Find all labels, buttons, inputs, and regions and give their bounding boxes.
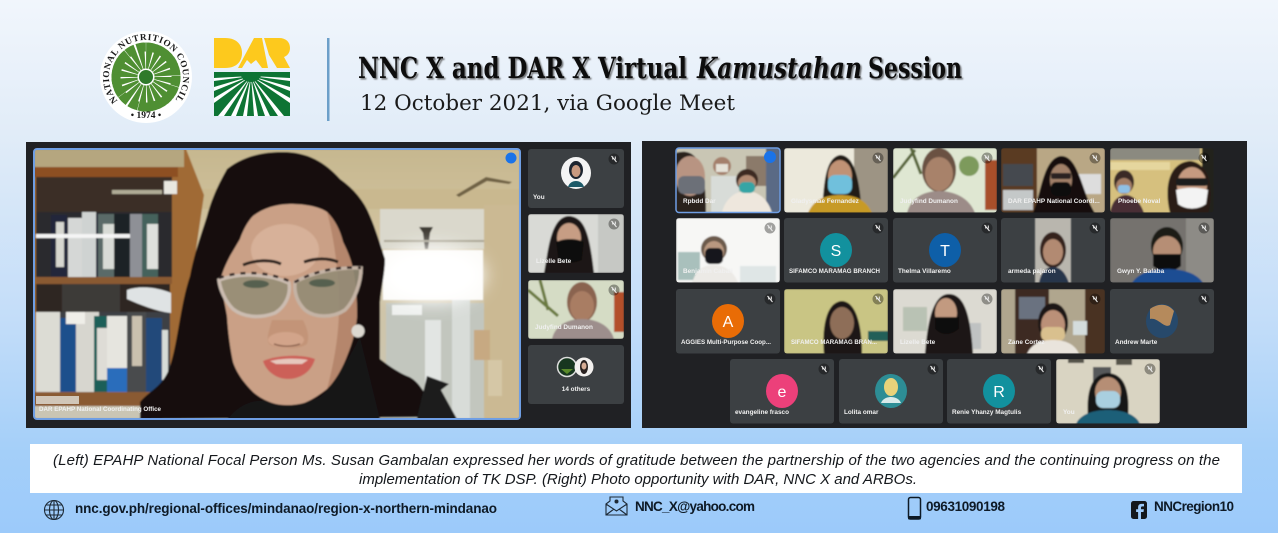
panel: left screenshot	[26, 142, 631, 428]
title: Session	[868, 51, 962, 85]
tile: evangeline frasco	[730, 359, 834, 424]
footer: email: NNC_X@yahoo.com	[635, 499, 755, 514]
panel: right screenshot gallery	[642, 141, 1247, 428]
tile: armeda pajaron: armeda pajaron	[1008, 268, 1056, 275]
title: Kamustahan	[696, 51, 862, 85]
logo: National Nutrition Council: NATIONAL NUTRITION COUNCIL	[103, 34, 190, 104]
tile: Renie Yhanzy Magtulis: Renie Yhanzy Magtulis	[952, 409, 1022, 416]
tile: Phoebe Noval: Phoebe Noval	[1118, 198, 1160, 205]
tile: evangeline frasco: evangeline frasco	[735, 409, 789, 416]
tile: Judyfind Dumanon: Judyfind Dumanon	[900, 198, 958, 205]
tile: Gladysmae Fernandez	[784, 148, 888, 213]
logo: DAR	[214, 38, 290, 116]
tile: SIFAMCO MARAMAG BRAN...	[784, 289, 888, 354]
tile: Renie Yhanzy Magtulis	[947, 359, 1051, 424]
tile: Lizelle Bete: Lizelle Bete	[900, 339, 936, 346]
tile: Gladysmae Fernandez: Gladysmae Fernandez	[791, 198, 859, 205]
tile: Lolita omar: Lolita omar	[844, 409, 879, 416]
tile: Judyfind Dumanon: Judyfind Dumanon	[535, 324, 593, 331]
tile: SIFAMCO MARAMAG BRAN...: SIFAMCO MARAMAG BRAN...	[791, 339, 877, 346]
tile: Andrew Marte	[1110, 289, 1214, 354]
glasses	[219, 275, 289, 316]
tile: You: You	[1063, 409, 1075, 416]
tile: Gwyn Y. Balaba: Gwyn Y. Balaba	[1117, 268, 1165, 275]
tile: DAR EPAHP National Coordi...: DAR EPAHP National Coordi...	[1008, 198, 1100, 205]
tile: You	[1056, 359, 1160, 424]
tile: Gwyn Y. Balaba	[1110, 218, 1214, 283]
face	[220, 204, 357, 406]
tile: Rpbdd Dar	[675, 148, 780, 213]
tile: Phoebe Noval	[1110, 148, 1214, 213]
tile: Renie Yhanzy Magtulis: R	[993, 384, 1005, 401]
tile: 14 others: 14 others	[562, 386, 591, 393]
footer: facebook	[1131, 499, 1234, 519]
tile: Lizelle Bete	[893, 289, 997, 354]
footer: facebook: NNCregion10	[1154, 499, 1234, 514]
tile: Judyfind Dumanon	[528, 280, 624, 339]
tile: SIFAMCO MARAMAG BRANCH: SIFAMCO MARAMAG BRANCH	[789, 268, 880, 275]
tile: AGGIES Multi-Purpose Coop	[676, 289, 780, 354]
tile: AGGIES Multi-Purpose Coop: AGGIES Multi-Purpose Coop...	[681, 339, 771, 346]
tile: Rpbdd Dar: Rpbdd Dar	[683, 198, 716, 205]
main video: speaker	[34, 149, 520, 419]
tile: AGGIES Multi-Purpose Coop: A	[723, 314, 734, 331]
tile: You: You	[533, 194, 545, 201]
bookcase	[34, 149, 204, 406]
tile: Zane Cortez: Zane Cortez	[1008, 339, 1045, 346]
hair	[140, 152, 437, 419]
tile: Benjamin Cabali	[676, 218, 780, 283]
caption box	[30, 444, 1242, 493]
tile: Thelma Villaremo: T	[940, 243, 950, 260]
mouth	[263, 356, 315, 379]
tile: Lizelle Bete: Lizelle Bete	[536, 258, 572, 265]
tile: SIFAMCO MARAMAG BRANCH: S	[831, 243, 841, 260]
tile: Lolita omar	[839, 359, 943, 424]
tile: Andrew Marte: Andrew Marte	[1115, 339, 1158, 346]
footer: email	[606, 497, 755, 515]
tile: Thelma Villaremo: Thelma Villaremo	[898, 268, 951, 275]
tile: 14 others	[528, 345, 624, 404]
tile: You	[528, 149, 624, 208]
logo: National Nutrition Council: • 1974 •	[131, 111, 161, 121]
title	[358, 51, 962, 85]
nose	[268, 320, 308, 348]
tile: Zane Cortez	[1001, 289, 1105, 354]
tile: Thelma Villaremo	[893, 218, 997, 282]
caption box: implementation of TK DSP. (Right) Photo opportunity with DAR, NNC X and ARBOs.	[359, 471, 917, 488]
tile: SIFAMCO MARAMAG BRANCH	[784, 218, 888, 282]
footer: website: nnc.gov.ph/regional-offices/mindanao/region-x-northern-mindanao	[75, 501, 497, 516]
footer: phone	[908, 498, 1005, 520]
header divider	[327, 38, 330, 121]
tile: Benjamin Cabali: Benjamin Cabali	[683, 268, 733, 275]
tile: Judyfind Dumanon	[893, 148, 997, 213]
subtitle: date and platform: 12 October 2021, via Google Meet	[360, 91, 735, 116]
tile: DAR EPAHP National Coordi...	[1001, 148, 1105, 213]
caption box: (Left) EPAHP National Focal Person Ms. Susan Gambalan expressed her words of gratitude between the partnership of the two agencies and the continuing progress on the	[53, 452, 1220, 469]
tile: armeda pajaron	[1001, 218, 1105, 283]
tile: Lizelle Bete	[528, 214, 624, 273]
main video: speaker: DAR EPAHP National Coordinating Office	[39, 406, 161, 413]
neck and collar	[228, 337, 380, 419]
footer: phone: 09631090198	[926, 499, 1005, 514]
tile: evangeline frasco: e	[778, 384, 787, 401]
title: NNC X and DAR X Virtual	[358, 51, 687, 85]
